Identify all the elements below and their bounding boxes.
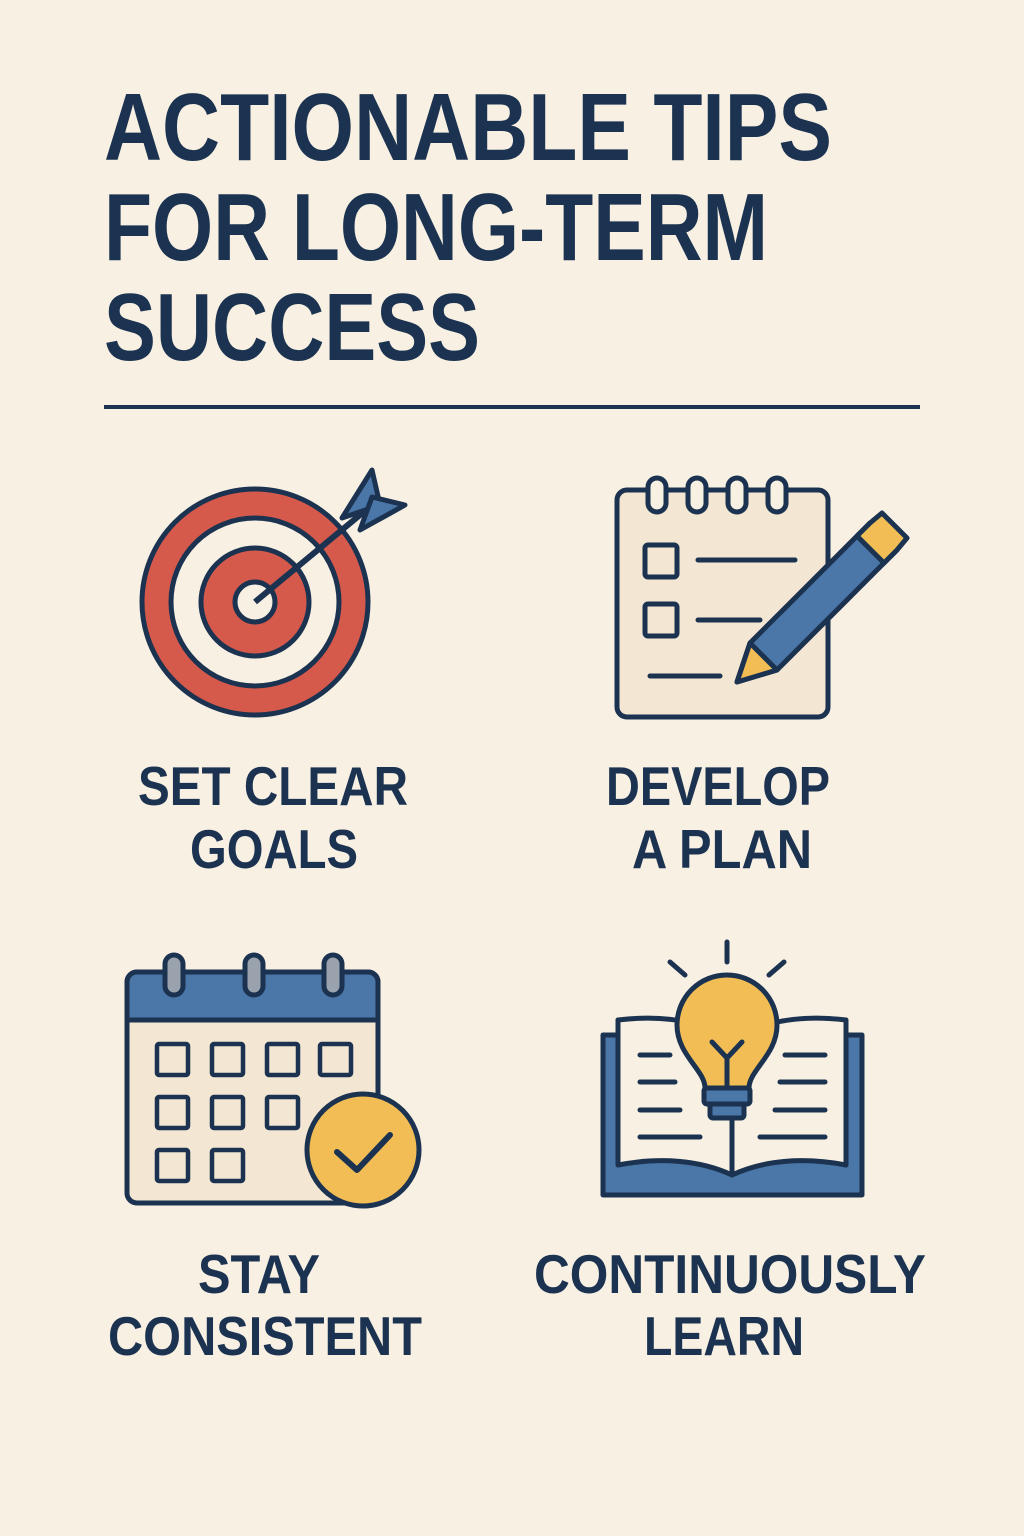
title: ACTIONABLE TIPS — [104, 74, 832, 181]
panel: stay consistent — [108, 955, 422, 1367]
label: SET CLEAR — [138, 755, 408, 817]
icon: notepad — [617, 478, 907, 717]
label — [606, 755, 830, 880]
title: FOR LONG-TERM — [104, 174, 768, 281]
icon: calendar — [127, 955, 419, 1206]
label — [534, 1243, 926, 1367]
panel: continuously learn — [534, 942, 926, 1367]
label: DEVELOP — [606, 755, 830, 817]
title — [104, 74, 832, 381]
icon: target — [142, 470, 405, 715]
label — [138, 755, 408, 880]
icon: book with lightbulb — [603, 942, 862, 1195]
label: CONTINUOUSLY — [534, 1243, 926, 1305]
label: STAY — [198, 1243, 320, 1305]
label: GOALS — [190, 818, 358, 880]
label: A PLAN — [632, 818, 812, 880]
label: LEARN — [644, 1305, 804, 1367]
label — [108, 1243, 422, 1367]
panel: set clear goals — [138, 470, 408, 880]
label: CONSISTENT — [108, 1305, 422, 1367]
title: SUCCESS — [104, 274, 480, 381]
panel: develop a plan — [606, 478, 907, 880]
